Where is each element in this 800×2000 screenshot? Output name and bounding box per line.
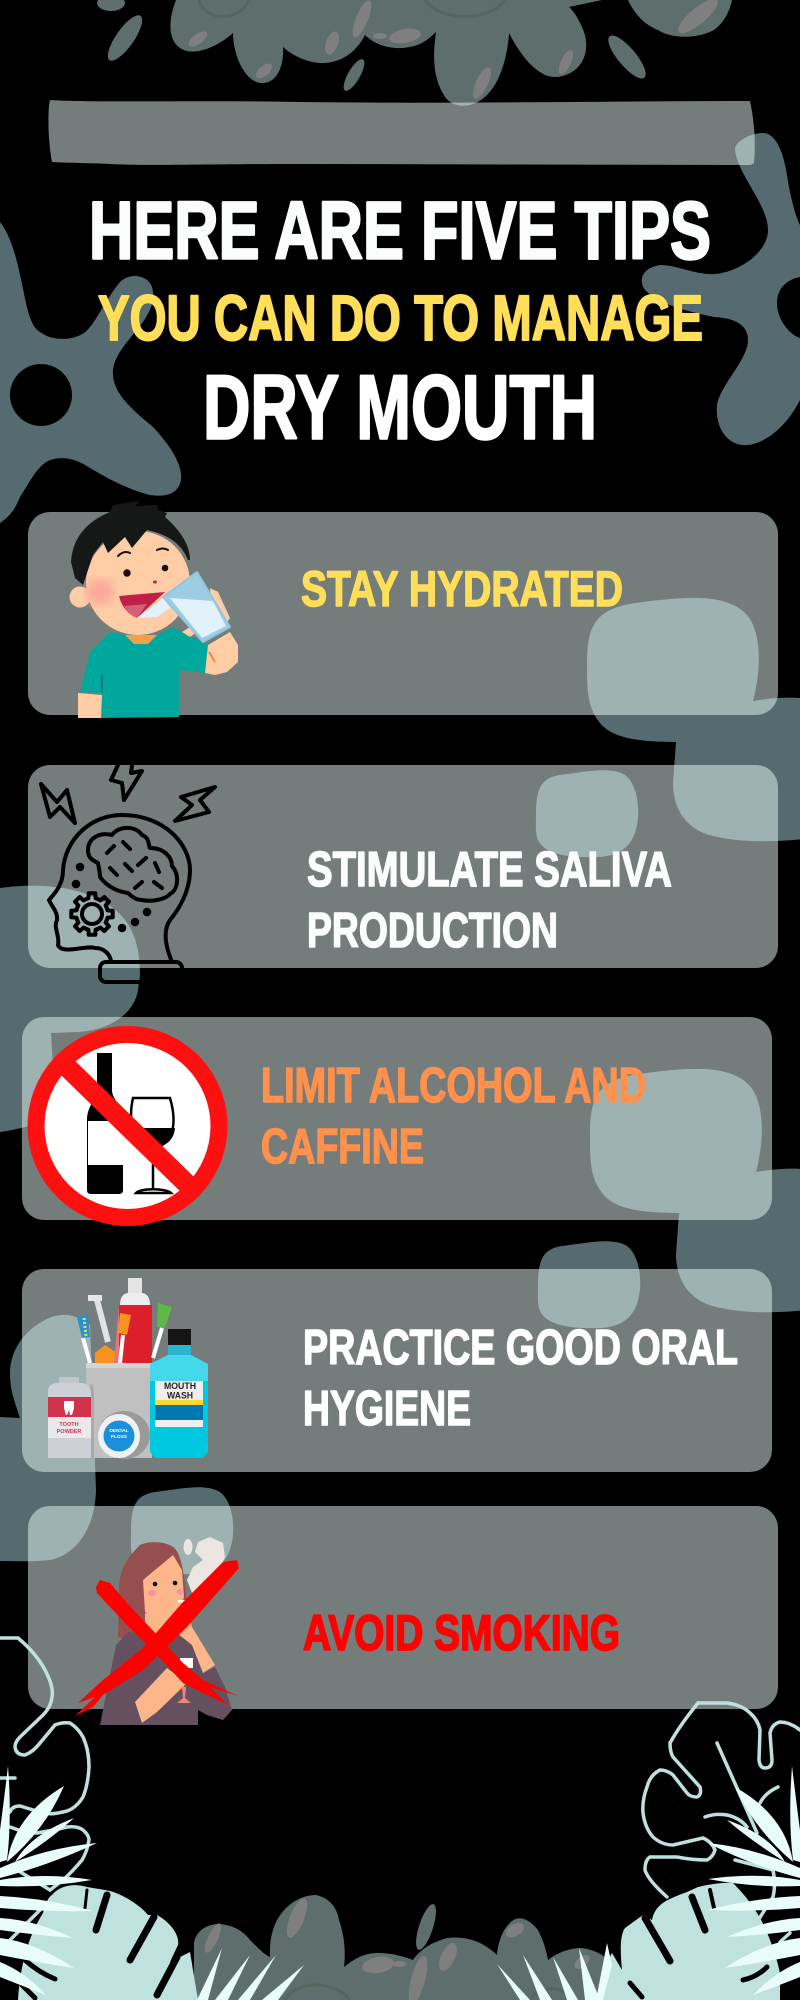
splat: left <box>0 222 181 523</box>
tip text: stimulate saliva production <box>307 843 672 958</box>
tip text: stimulate saliva production: PRODUCTION <box>307 904 558 958</box>
icon: oral hygiene products: MOUTH <box>164 1381 196 1391</box>
tip text: avoid smoking: AVOID SMOKING <box>303 1605 620 1661</box>
dots in head <box>72 863 151 932</box>
icon: oral hygiene products: DENTAL <box>109 1428 129 1434</box>
panel: oral hygiene <box>22 1269 772 1472</box>
palm fronds: right <box>707 1766 800 1995</box>
icon: oral hygiene products: FLOSS <box>111 1434 128 1440</box>
rounded blobs behind panels <box>0 598 800 1574</box>
tip text: limit alcohol and caffine: CAFFINE <box>261 1120 424 1174</box>
title: DRY MOUTH <box>203 358 597 458</box>
icon: boy drinking water <box>70 501 238 718</box>
icon: head with brain and lightning <box>41 765 215 982</box>
bottom paint splash <box>194 1895 607 2000</box>
tip text: stay hydrated: STAY HYDRATED <box>301 561 623 617</box>
icon: oral hygiene products <box>48 1278 208 1459</box>
splat: top right <box>642 133 800 445</box>
monstera leaf: left <box>18 1885 198 2000</box>
tip text: limit alcohol and caffine <box>261 1059 646 1174</box>
icon: oral hygiene products: TOOTH <box>59 1422 79 1428</box>
icon: oral hygiene products: POWDER <box>57 1429 81 1435</box>
monstera leaf: right <box>603 1883 780 2000</box>
palm fronds: bottom centre <box>197 1943 612 2000</box>
leaf outline: right <box>643 1703 800 1942</box>
tip text: limit alcohol and caffine: LIMIT ALCOHOL AND <box>261 1059 646 1113</box>
tip text: practice good oral hygiene: HYGIENE <box>303 1382 471 1436</box>
panel: stimulate saliva <box>28 765 778 982</box>
icon: no alcohol sign <box>28 1026 228 1226</box>
panel: avoid smoking <box>28 1506 778 1725</box>
palm fronds: left <box>0 1766 97 1995</box>
icon: oral hygiene products: WASH <box>167 1390 193 1400</box>
panel: limit alcohol <box>22 1017 772 1226</box>
title banner <box>48 100 755 165</box>
tip text: practice good oral hygiene <box>303 1321 738 1436</box>
leaf outline: left <box>0 1638 89 1940</box>
tip text: stimulate saliva production: STIMULATE SALIVA <box>307 843 672 897</box>
top paint splash <box>97 0 732 106</box>
title <box>89 186 711 458</box>
panel: stay hydrated <box>28 501 778 718</box>
icon: crossed out woman smoking <box>75 1537 239 1725</box>
